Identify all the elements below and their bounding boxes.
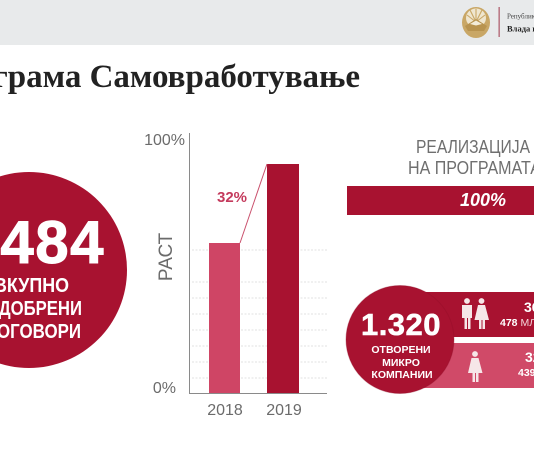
icon: woman [468, 351, 482, 382]
axis labels: 0% [153, 380, 176, 397]
progress bar [347, 186, 534, 215]
grid lines [192, 250, 327, 378]
axis labels [144, 132, 302, 419]
band: total [400, 292, 534, 337]
axis title: РАСТ [156, 232, 177, 281]
circle [346, 286, 454, 394]
circle caption [371, 344, 433, 381]
growth connector [240, 164, 267, 243]
panel: total approved contracts circle [0, 172, 127, 368]
circle caption: ОТВОРЕНИ [371, 344, 431, 356]
band: women [400, 343, 534, 388]
axis labels: 2019 [266, 402, 302, 419]
circle caption: МИКРО [382, 357, 420, 369]
axes [190, 133, 327, 394]
icon: man and woman [462, 298, 489, 329]
bar chart: growth [144, 132, 327, 419]
panel: programme realisation [347, 137, 534, 215]
axis labels: 100% [144, 132, 185, 149]
circle caption [0, 275, 82, 343]
progress value: 100% [460, 190, 506, 210]
icon: coat of arms emblem [462, 7, 490, 38]
growth label: 32% [217, 189, 247, 206]
bar 2019 [267, 164, 299, 393]
bar 2018 [209, 243, 240, 393]
header band [0, 0, 534, 45]
number: 1.320 [361, 307, 441, 342]
axis labels: 2018 [207, 402, 243, 419]
heading [408, 137, 534, 178]
circle caption: КОМПАНИИ [371, 369, 433, 381]
panel: micro companies [346, 286, 534, 394]
government name text [507, 12, 534, 34]
